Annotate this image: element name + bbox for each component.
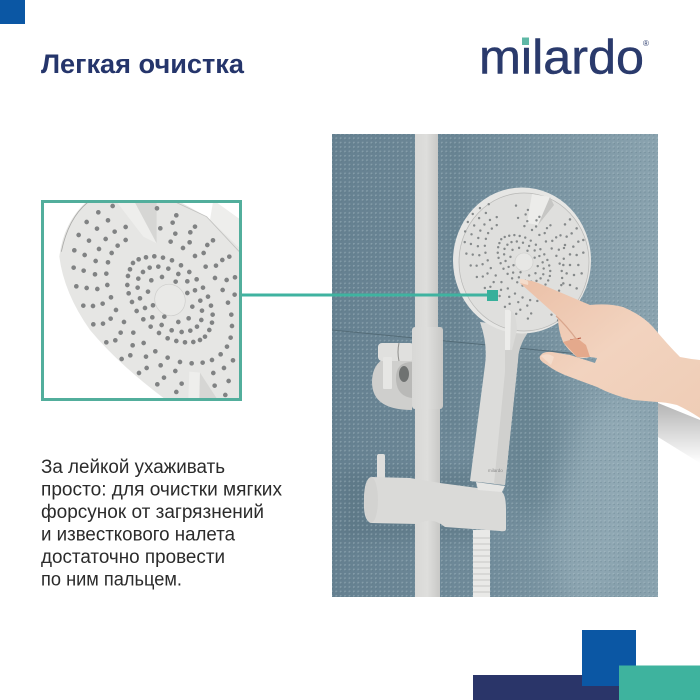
logo: milardo: ®	[643, 39, 649, 48]
corner square: top left	[0, 0, 25, 24]
body text: достаточно провести	[41, 547, 225, 568]
zoomed panel: shower head nozzles	[41, 200, 243, 410]
wall	[332, 134, 658, 597]
callout connector line	[242, 294, 492, 296]
handle	[470, 322, 531, 485]
body text	[41, 457, 282, 590]
body text: просто: для очистки мягких	[41, 480, 282, 500]
body text: и известкового налета	[41, 524, 235, 546]
logo: milardo: milardo	[479, 32, 644, 84]
title: Легкая очистка	[41, 49, 245, 79]
photo: shower and hand	[332, 134, 700, 616]
grey shadow beyond photo	[658, 403, 700, 463]
slide holder	[364, 477, 506, 531]
hose	[473, 530, 490, 597]
body text: форсунок от загрязнений	[41, 502, 264, 523]
callout marker square	[487, 290, 498, 301]
shower head	[453, 188, 591, 350]
body text: За лейкой ухаживать	[41, 457, 225, 478]
wall mount	[372, 343, 414, 410]
holder pin	[377, 454, 385, 479]
rail sleeve and lower pipe	[412, 327, 443, 409]
handle logo: milardo	[488, 468, 503, 473]
body text: по ним пальцем.	[41, 570, 182, 590]
hand	[520, 279, 700, 418]
decorative blocks: bottom right	[473, 630, 700, 700]
rail pipe	[415, 134, 438, 329]
